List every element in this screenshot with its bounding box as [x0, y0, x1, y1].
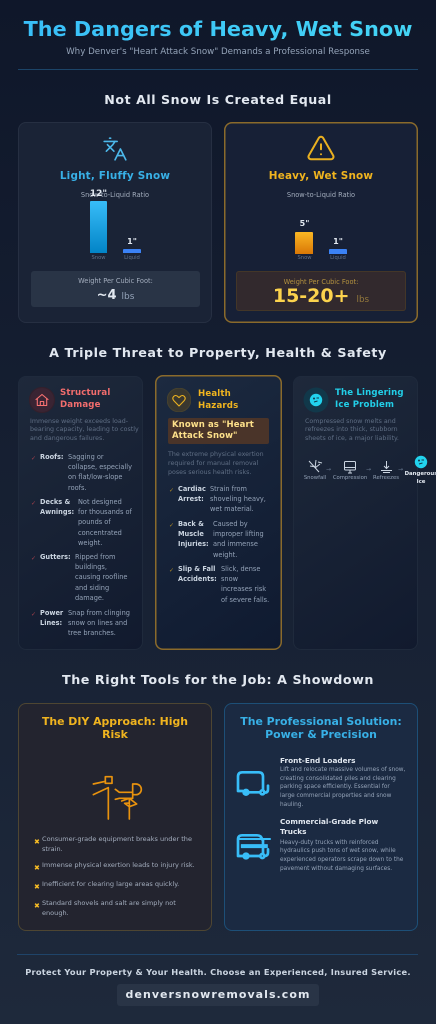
- list: DIY risks: Consumer-grade equipment breaks under the: [42, 835, 192, 843]
- panel: lingering ice: [293, 376, 418, 650]
- flow diagram: ice formation: [304, 456, 438, 485]
- list: DIY risks: [34, 835, 195, 917]
- description: The extreme physical exertion: [168, 450, 264, 458]
- text: front-end loaders: hauling.: [280, 802, 303, 808]
- heading: right tools: The Right Tools for the Job: A Showdown: [62, 672, 374, 687]
- item: back injuries: weight.: [213, 551, 237, 559]
- label: dangerous ice: [405, 471, 438, 485]
- item: power lines: Power: [40, 609, 63, 617]
- text: front-end loaders: large commercial properties and snow: [280, 793, 391, 799]
- icon: translate glyph: [103, 137, 127, 161]
- item: roofs: [31, 453, 132, 492]
- card heading: Heavy, Wet Snow: [269, 170, 373, 182]
- item: power lines: [31, 609, 130, 637]
- callout: heart attack snow: [168, 418, 269, 444]
- icon: warning triangle: [307, 136, 334, 160]
- item: slip and fall: Slip & Fall: [178, 565, 215, 573]
- icon: refreezes: [381, 461, 392, 473]
- list: DIY risks: Immense physical exertion leads to injury risk.: [42, 861, 195, 869]
- card heading: Light, Fluffy Snow: [60, 170, 170, 182]
- icon: dangerous ice: [414, 456, 428, 468]
- liquid bar: [329, 249, 347, 254]
- text: plow trucks: experienced operators scrape down to the: [280, 857, 403, 863]
- text: front-end loaders: Lift and relocate massive volumes of snow,: [280, 767, 405, 773]
- item: power lines: tree branches.: [68, 629, 116, 637]
- item: back injuries: ✓: [169, 522, 174, 529]
- panel: heavy wet snow: [224, 122, 418, 323]
- description: sheets of ice, a major liability.: [305, 435, 399, 442]
- snow value: 12": [90, 189, 107, 199]
- description: [168, 450, 264, 476]
- subtitle: Why Denver's "Heart Attack Snow" Demands a Professional Response: [66, 47, 370, 57]
- item: decks: Decks &: [40, 498, 70, 506]
- item: gutters: Ripped from: [75, 553, 115, 561]
- description: and dangerous failures.: [30, 435, 104, 442]
- text: plow trucks: Commercial-Grade Plow: [280, 817, 378, 826]
- list: DIY risks: Inefficient for clearing large areas quickly.: [42, 880, 179, 888]
- footer message: Protect Your Property & Your Health. Choose an Experienced, Insured Service.: [25, 967, 411, 977]
- label: dangerous ice: Dangerous: [405, 471, 437, 477]
- callout: heart attack snow: Known as "Heart: [172, 420, 254, 430]
- item: slip and fall: [169, 565, 269, 604]
- text: plow trucks: Trucks: [280, 827, 306, 836]
- item: back injuries: improper lifting: [213, 530, 264, 538]
- item: gutters: and siding: [75, 584, 109, 592]
- panel: professional solution: [224, 703, 418, 931]
- item: roofs: collapse, especially: [68, 463, 132, 471]
- icon: ice face: [304, 388, 328, 412]
- item: back injuries: Muscle: [178, 530, 204, 538]
- description: required for manual removal: [168, 460, 258, 466]
- panel heading: Health: [198, 389, 231, 399]
- liquid value: 1": [127, 237, 137, 246]
- icon: compression: [344, 461, 356, 474]
- text: plow trucks: [280, 817, 403, 872]
- item: back injuries: and immense: [213, 540, 258, 548]
- item: roofs: Roofs:: [40, 453, 64, 461]
- item: slip and fall: snow: [221, 575, 238, 583]
- weight value: ~4 lbs: [97, 288, 134, 303]
- item: cardiac arrest: Cardiac: [178, 485, 206, 493]
- text: plow trucks: hydraulics push tons of wet snow, while: [280, 848, 396, 854]
- item: back injuries: Caused by: [213, 520, 248, 528]
- item: slip and fall: ✓: [169, 567, 174, 574]
- arrow: →: [366, 466, 371, 473]
- text: plow trucks: pavement without damaging surfaces.: [280, 866, 392, 872]
- list: DIY risks: Standard shovels and salt are simply not: [42, 899, 176, 907]
- weight box: [31, 271, 200, 307]
- item: decks: [31, 498, 132, 547]
- item: slip and fall: increases risk: [221, 585, 266, 593]
- panel heading: Risk: [102, 728, 128, 741]
- ratio label: Snow-to-Liquid Ratio: [81, 191, 149, 199]
- item: decks: pounds of: [78, 518, 111, 526]
- risk item 2: ✖: [34, 864, 40, 872]
- item: gutters: damage.: [75, 594, 104, 602]
- panel heading: Power & Precision: [265, 728, 377, 741]
- panel heading: Hazards: [198, 401, 238, 411]
- panel heading: [335, 388, 404, 410]
- list: DIY risks: enough.: [42, 909, 69, 917]
- label: dangerous ice: Ice: [417, 479, 425, 485]
- panel heading: [198, 389, 238, 411]
- item: gutters: Gutters:: [40, 553, 71, 561]
- text: front-end loaders: creating consolidated piles and clearing: [280, 776, 396, 782]
- panel: DIY approach: [18, 703, 212, 931]
- icon: shovel and snowblower: [92, 776, 142, 820]
- icon: snowfall: [308, 460, 322, 472]
- panel: health hazards: [155, 375, 282, 650]
- panel: light fluffy snow: [18, 122, 212, 323]
- item: gutters: [31, 553, 128, 602]
- item: decks: ✓: [31, 500, 36, 507]
- icon: plow truck: [236, 834, 271, 860]
- website badge: denversnowremovals.com: [126, 988, 310, 1001]
- item: decks: weight.: [78, 539, 102, 547]
- title: The Dangers of Heavy, Wet Snow: [24, 17, 412, 41]
- description: Immense weight exceeds load-: [30, 418, 128, 424]
- liquid label: Liquid: [124, 255, 140, 261]
- item: decks: concentrated: [78, 529, 122, 537]
- bar chart: heavy snow ratio: [295, 219, 347, 261]
- item: cardiac arrest: wet material.: [210, 505, 254, 513]
- text: front-end loaders: parking space efficiently. Essential for: [280, 784, 390, 790]
- item: power lines: ✓: [31, 611, 36, 618]
- item: cardiac arrest: shoveling heavy,: [210, 495, 266, 503]
- text: front-end loaders: [280, 756, 405, 808]
- item: roofs: on flat/low-slope: [68, 473, 122, 481]
- risk item 3: ✖: [34, 883, 40, 891]
- liquid value: 1": [333, 237, 343, 246]
- panel heading: The Professional Solution:: [240, 715, 402, 728]
- item: power lines: Snap from clinging: [68, 609, 130, 617]
- liquid label: Liquid: [330, 255, 346, 261]
- item: roofs: roofs.: [68, 484, 86, 492]
- item: decks: Awnings:: [40, 508, 74, 516]
- description: poses serious health risks.: [168, 468, 251, 476]
- weight box: [236, 271, 406, 311]
- item: power lines: snow on lines and: [68, 619, 127, 627]
- risk item 1: ✖: [34, 838, 40, 846]
- item: decks: for thousands of: [78, 508, 132, 516]
- icon: front-end loader: [236, 771, 270, 796]
- list: DIY risks: strain.: [42, 845, 63, 853]
- item: cardiac arrest: Arrest:: [178, 495, 204, 503]
- liquid bar: [123, 249, 141, 253]
- item: roofs: ✓: [31, 455, 36, 462]
- heading: triple threat: A Triple Threat to Property, Health & Safety: [49, 345, 387, 360]
- label: compression: Compression: [333, 475, 367, 481]
- item: back injuries: Back &: [178, 520, 204, 528]
- panel heading: [240, 715, 402, 741]
- bar chart: light snow ratio: [90, 189, 141, 261]
- snow value: 5": [300, 219, 309, 228]
- item: gutters: causing roofline: [75, 573, 127, 581]
- item: cardiac arrest: Strain from: [210, 485, 247, 493]
- arrow: →: [398, 466, 403, 473]
- description: refreezes into thick, stubborn: [305, 426, 398, 433]
- item: back injuries: [169, 520, 264, 559]
- risk item 4: ✖: [34, 902, 40, 910]
- snow bar: [295, 232, 313, 254]
- arrow: →: [326, 466, 331, 473]
- panel heading: Structural: [60, 388, 110, 398]
- item: slip and fall: of severe falls.: [221, 596, 269, 604]
- item: slip and fall: Slick, dense: [221, 565, 260, 573]
- icon: house: [29, 387, 55, 413]
- snow label: Snow: [92, 255, 106, 261]
- panel heading: [42, 715, 188, 741]
- panel heading: Damage: [60, 400, 101, 410]
- callout: heart attack snow: Attack Snow": [172, 431, 238, 441]
- weight label: Weight Per Cubic Foot:: [78, 277, 153, 285]
- item: back injuries: Injuries:: [178, 540, 209, 548]
- item: cardiac arrest: [169, 485, 266, 513]
- panel: structural damage: [18, 376, 143, 650]
- label: refreezes: Refreezes: [373, 475, 399, 481]
- description: [30, 418, 139, 442]
- item: slip and fall: Accidents:: [178, 575, 217, 583]
- panel heading: [60, 388, 110, 410]
- weight label: Weight Per Cubic Foot:: [284, 278, 358, 286]
- text: plow trucks: Heavy-duty trucks with reinforced: [280, 840, 378, 846]
- panel heading: Ice Problem: [335, 400, 394, 410]
- snow bar: [90, 201, 107, 253]
- ratio label: Snow-to-Liquid Ratio: [287, 191, 355, 199]
- description: Compressed snow melts and: [305, 418, 396, 424]
- item: roofs: Sagging or: [68, 453, 104, 461]
- item: power lines: Lines:: [40, 619, 62, 627]
- description: bearing capacity, leading to costly: [30, 426, 139, 433]
- item: gutters: buildings,: [75, 563, 107, 571]
- label: snowfall: Snowfall: [304, 475, 326, 481]
- text: front-end loaders: Front-End Loaders: [280, 756, 355, 765]
- icon: heart: [167, 388, 191, 412]
- item: gutters: ✓: [31, 555, 36, 562]
- description: [305, 418, 399, 442]
- item: decks: Not designed: [78, 498, 122, 506]
- heading: not all snow: Not All Snow Is Created Equal: [104, 92, 332, 107]
- snow label: Snow: [298, 255, 312, 261]
- item: cardiac arrest: ✓: [169, 487, 174, 494]
- panel heading: The Lingering: [335, 388, 404, 398]
- website badge: [117, 984, 319, 1006]
- panel heading: The DIY Approach: High: [42, 715, 188, 728]
- weight value: 15-20+ lbs: [273, 285, 369, 307]
